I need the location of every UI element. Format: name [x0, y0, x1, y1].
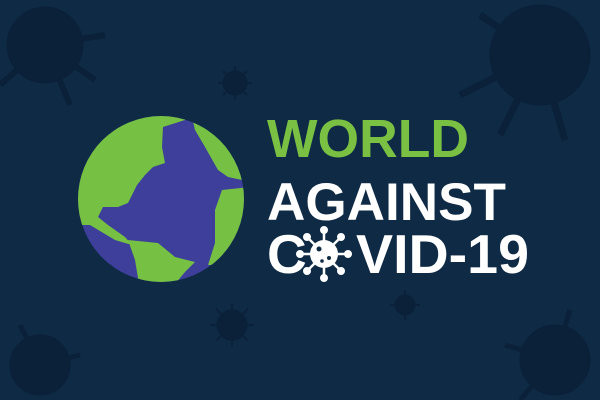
title: COVID-19: VID-19	[356, 223, 529, 285]
Africa	[208, 188, 244, 265]
title: AGAINST: AGAINST	[267, 173, 506, 232]
title: COVID-19	[267, 223, 529, 285]
title: WORLD: WORLD	[267, 109, 469, 169]
icon: virus O	[296, 226, 352, 282]
title: COVID-19: C	[267, 223, 307, 285]
North America	[78, 116, 185, 244]
South America	[128, 240, 195, 282]
globe	[78, 116, 244, 282]
Europe	[193, 122, 242, 180]
